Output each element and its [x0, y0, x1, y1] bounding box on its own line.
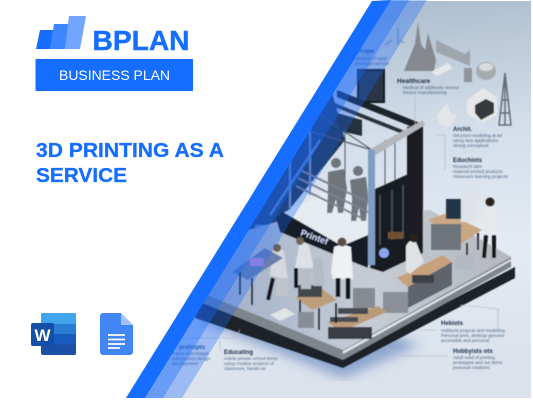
logo: BPLAN [92, 25, 190, 56]
small table [295, 287, 337, 310]
text: right-hand labels: prototype service [355, 61, 390, 66]
icon: logo bars [36, 16, 86, 49]
text: right-hand labels: Article private school items [224, 356, 278, 361]
floor prints [270, 308, 295, 321]
right scientist [481, 198, 498, 258]
text: right-hand labels: Device manufacturing [403, 90, 447, 95]
text: right-hand labels: Educhiots [453, 158, 483, 164]
back wall machinery behind overlay [185, 85, 372, 300]
text: right-hand labels: Hebiots [441, 321, 464, 327]
platform [195, 210, 515, 378]
icon: Word document: W [34, 326, 52, 345]
text: right-hand labels: using new applications [453, 138, 499, 143]
seated scientists [268, 237, 325, 300]
text: right-hand labels: Adult solid of printing [453, 355, 495, 360]
text: right-hand labels: Prope [357, 49, 375, 55]
grey printed figures [327, 158, 368, 221]
back desk [428, 213, 482, 243]
text: right-hand labels: Healthcare [397, 78, 431, 85]
text: right-hand labels: Medical of rapid [355, 56, 387, 61]
title [36, 140, 224, 187]
3D printer [276, 70, 425, 272]
standing scientist [331, 238, 353, 299]
icon: Word document [31, 313, 76, 355]
text: right-hand labels: Hobbyists ots [453, 349, 493, 355]
illustration: 3D printing facility [120, 0, 533, 400]
text: right-hand labels: using creative projects of [224, 361, 275, 366]
upper prototypes [385, 22, 511, 127]
text: right-hand labels: prohopts [179, 345, 206, 351]
benches and scientists [232, 190, 498, 339]
text: right-hand labels: Hobbyist projects and modelling [441, 328, 505, 333]
text: right-hand labels: strong conceptual [453, 143, 489, 148]
subtitle box: BUSINESS PLAN [59, 67, 170, 83]
text: right-hand labels: classroom learning projects [453, 174, 509, 179]
text: right-hand labels: Personal print, desktop genuine [441, 333, 505, 338]
3D printer: Printef [299, 227, 330, 247]
text: right-hand labels: classroom, hands-on [224, 366, 266, 371]
text: right-hand labels: Rapid of prototype [172, 351, 209, 356]
title: SERVICE [36, 165, 127, 187]
text: right-hand labels: development [172, 361, 199, 366]
icon: Google Docs [100, 313, 133, 355]
kneeling scientist [406, 234, 424, 274]
bench [397, 255, 452, 287]
text: right-hand labels: material printed products [453, 169, 503, 174]
subtitle box [36, 59, 193, 91]
text: right-hand labels: Research labs [453, 164, 483, 169]
text: right-hand labels: and product design [172, 356, 211, 361]
text: right-hand labels: personal creations [453, 365, 491, 370]
logo [36, 16, 190, 56]
text: right-hand labels: accessible and personal [441, 338, 489, 343]
title: 3D PRINTING AS A [36, 140, 224, 162]
bottom bench [328, 306, 387, 328]
lab table [232, 248, 283, 280]
diagonal overlay: translucent blue bands [126, 0, 427, 398]
text: right-hand labels: prototypes and our items [453, 360, 503, 365]
text: right-hand labels: Medical of additively service [403, 85, 460, 90]
text: right-hand labels [172, 49, 509, 371]
text: right-hand labels: Educating [224, 350, 253, 356]
text: right-hand labels: Structure modeling at ad [453, 133, 503, 138]
text: right-hand labels: Archit. [453, 127, 472, 133]
